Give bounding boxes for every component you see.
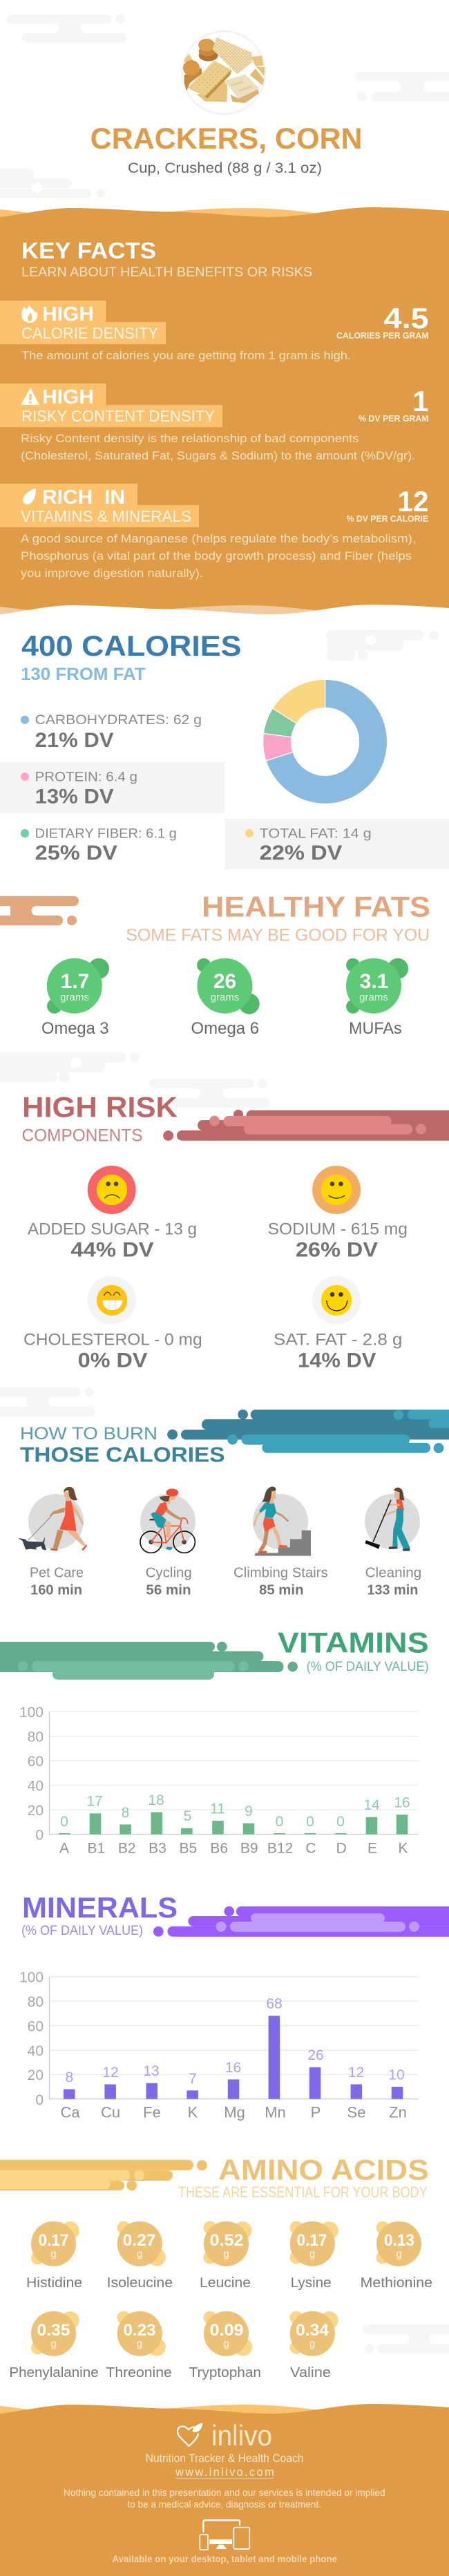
bar chart: vitamins: C (305, 1840, 316, 1856)
disclaimer: to be a medical advice, diagnosis or treatment. (127, 2499, 321, 2510)
activity: pet care: 160 min (30, 1582, 82, 1598)
activity: cleaning: Cleaning (365, 1566, 421, 1581)
stat: omega 3 (41, 958, 109, 1038)
panel: healthy fats (0, 891, 430, 1038)
bar chart: minerals: Mn (265, 2103, 286, 2121)
activity: pet care: Pet Care (30, 1566, 84, 1581)
bar chart: vitamins: B5 (180, 1840, 197, 1856)
stat: phenylalanine: Phenylalanine (9, 2365, 99, 2380)
label: risky content density: RISKY CONTENT DENSITY (21, 407, 215, 425)
bar chart: vitamins: 60 (28, 1754, 44, 1770)
panel: amino acids (0, 2153, 432, 2380)
icon: sad face (97, 1175, 127, 1205)
bar chart: vitamins: 0 (336, 1814, 345, 1830)
bar chart: vitamins: 16 (394, 1795, 410, 1810)
high risk subheading: COMPONENTS (22, 1126, 142, 1146)
stat: threonine: Threonine (106, 2365, 172, 2380)
risk: saturated fat (274, 1276, 402, 1372)
bar chart: minerals: 12 (348, 2065, 364, 2081)
stat: leucine: Leucine (200, 2275, 251, 2291)
calories from fat: 130 FROM FAT (21, 665, 146, 684)
stat: tryptophan (189, 2311, 261, 2380)
panel: vitamins (0, 1626, 429, 1856)
bar chart: vitamins: B6 (210, 1840, 228, 1856)
bar chart: vitamins: 40 (28, 1779, 44, 1794)
label: high: HIGH (42, 386, 94, 408)
burn heading line 1: HOW TO BURN (20, 1424, 157, 1443)
stat: leucine: g (223, 2248, 229, 2260)
stat: lysine: g (309, 2248, 315, 2260)
stat: omega 6 (191, 958, 260, 1038)
risk: sodium: SODIUM - 615 mg (268, 1220, 408, 1239)
stat: omega 6: grams (211, 992, 239, 1003)
stat: methionine: Methionine (361, 2275, 432, 2291)
stat: mufas (346, 958, 408, 1038)
icon: neutral smile face (321, 1175, 352, 1205)
stat: mufas: MUFAs (349, 1019, 402, 1038)
unit: dv per gram: % DV PER GRAM (359, 413, 429, 424)
logo: inlivo: inlivo (211, 2419, 272, 2452)
stat: mufas: grams (359, 992, 388, 1003)
bar chart: minerals: Ca (60, 2103, 80, 2121)
bar chart: vitamins: K (398, 1840, 408, 1856)
stat: methionine: 0.13 (384, 2231, 414, 2250)
bar chart: minerals: 13 (143, 2063, 160, 2079)
legend: dietary fiber: DIETARY FIBER: 6.1 g (35, 827, 177, 842)
legend: protein (0, 762, 225, 813)
bar chart: minerals: 20 (28, 2067, 44, 2083)
website link: www.inlivo.com (175, 2466, 274, 2479)
risk: sodium (268, 1166, 408, 1261)
bar chart: minerals: 100 (19, 1969, 44, 1986)
stat: tryptophan: g (223, 2338, 229, 2349)
bar chart: vitamins: 0 (35, 1827, 44, 1844)
panel: high risk components (22, 1091, 449, 1372)
disclaimer (64, 2487, 385, 2510)
stat: threonine: g (137, 2338, 142, 2349)
risk: saturated fat: SAT. FAT - 2.8 g (274, 1331, 402, 1349)
bar chart: vitamins: 8 (122, 1805, 129, 1821)
tagline: Nutrition Tracker & Health Coach (146, 2452, 304, 2465)
stat: isoleucine: 0.27 (123, 2231, 156, 2250)
vitamins subheading: (% OF DAILY VALUE) (307, 1659, 429, 1674)
legend: carbohydrates (21, 713, 202, 752)
unit: dv per calorie: % DV PER CALORIE (347, 513, 428, 524)
legend: total fat: 22% DV (260, 842, 342, 864)
bar chart: vitamins: B12 (267, 1840, 293, 1856)
bar chart: vitamins: 17 (86, 1794, 103, 1810)
bar chart: vitamins: 18 (148, 1792, 164, 1808)
bar chart: minerals: 68 (266, 1996, 283, 2012)
bar chart: minerals: Zn (389, 2103, 407, 2121)
icon: leaf (23, 489, 36, 504)
minerals heading: MINERALS (22, 1891, 178, 1924)
stat: methionine: g (396, 2248, 402, 2260)
illustration: woman walking dog (18, 1487, 87, 1551)
panel: minerals (19, 1891, 449, 2121)
value: 12: 12 (398, 485, 428, 518)
bar chart: minerals (19, 1969, 418, 2121)
bar chart: minerals: 26 (307, 2047, 324, 2063)
activity: cycling: 56 min (146, 1582, 191, 1598)
stat: valine (290, 2311, 338, 2380)
stat: histidine: 0.17 (39, 2231, 69, 2250)
stat: isoleucine: g (137, 2248, 142, 2260)
risk: cholesterol (23, 1276, 202, 1372)
activity: cycling: Cycling (146, 1566, 192, 1581)
stat: histidine: Histidine (26, 2275, 82, 2291)
risk: added sugar (28, 1166, 197, 1261)
calories heading: 400 CALORIES (21, 629, 242, 662)
bar chart: minerals: 16 (225, 2060, 241, 2076)
bar chart: vitamins: 80 (28, 1730, 44, 1745)
stat: omega 6: Omega 6 (191, 1019, 259, 1038)
description (21, 432, 415, 462)
stat: histidine: g (50, 2248, 57, 2260)
stat: valine: g (309, 2338, 315, 2349)
macronutrient donut chart (263, 679, 388, 804)
minerals subheading: (% OF DAILY VALUE) (21, 1923, 143, 1938)
legend: total fat (225, 819, 449, 869)
stat: mufas: 3.1 (360, 970, 388, 993)
healthy fats subheading: SOME FATS MAY BE GOOD FOR YOU (126, 926, 430, 945)
description: (Cholesterol, Saturated Fat, Sugars & Sodium) to the amount (%DV/gr). (21, 449, 415, 462)
title: CRACKERS, CORN (90, 122, 363, 155)
bar chart: minerals: 8 (65, 2070, 73, 2085)
bar chart: minerals: 12 (102, 2065, 119, 2081)
bar chart: minerals: 80 (28, 1994, 44, 2010)
bar chart: minerals: Fe (143, 2103, 161, 2121)
unit: calories per gram: CALORIES PER GRAM (336, 330, 429, 341)
bar chart: vitamins: B2 (118, 1840, 136, 1856)
stat: methionine (361, 2221, 432, 2291)
panel: footer (0, 2404, 449, 2576)
stat: threonine: 0.23 (123, 2321, 156, 2340)
risk: added sugar: 44% DV (70, 1238, 154, 1261)
serving size subtitle: Cup, Crushed (88 g / 3.1 oz) (128, 160, 322, 176)
legend: carbohydrates: CARBOHYDRATES: 62 g (35, 713, 202, 728)
activity: climbing stairs (233, 1486, 328, 1598)
panel: key facts (0, 207, 449, 632)
bar chart: minerals: 60 (28, 2019, 44, 2034)
bar chart: minerals: Se (347, 2103, 365, 2121)
bar chart: vitamins: 20 (28, 1803, 44, 1819)
illustration: woman climbing stairs (253, 1486, 311, 1556)
illustration: woman sweeping (365, 1488, 420, 1551)
activity: pet care (18, 1487, 87, 1598)
legend: dietary fiber: 25% DV (35, 842, 117, 864)
stat: histidine (26, 2222, 82, 2291)
bar chart: minerals: 10 (388, 2067, 405, 2083)
stat: leucine (200, 2221, 251, 2291)
stat: phenylalanine: g (50, 2338, 57, 2349)
food image: crackers (182, 31, 265, 114)
activity: climbing stairs: 85 min (259, 1582, 304, 1598)
stat: omega 6: 26 (213, 970, 236, 993)
icon: devices (200, 2520, 249, 2550)
icon: happy face (321, 1285, 352, 1316)
key facts subheading: LEARN ABOUT HEALTH BENEFITS OR RISKS (21, 265, 312, 280)
stat: lysine (290, 2221, 338, 2291)
bar chart: vitamins: 11 (210, 1801, 225, 1817)
label: rich in: RICH IN (42, 486, 125, 509)
legend: protein: 13% DV (35, 786, 114, 808)
bar chart: minerals: 0 (35, 2092, 44, 2108)
icon: flame (21, 304, 37, 323)
bar chart: vitamins: 9 (245, 1803, 253, 1819)
vitamins heading: VITAMINS (278, 1626, 429, 1658)
risk: cholesterol: CHOLESTEROL - 0 mg (23, 1331, 202, 1349)
panel: calories (0, 629, 449, 869)
icon: grinning face (97, 1285, 127, 1316)
stat: isoleucine (107, 2221, 173, 2291)
stat: isoleucine: Isoleucine (107, 2275, 173, 2291)
bar chart: vitamins: B1 (87, 1840, 105, 1856)
key facts heading: KEY FACTS (21, 238, 156, 263)
activity: climbing stairs: Climbing Stairs (233, 1566, 328, 1581)
fact: calorie density (0, 301, 429, 362)
risk: sodium: 26% DV (296, 1238, 378, 1261)
description: Risky Content density is the relationship of bad components (21, 432, 359, 445)
legend: protein: PROTEIN: 6.4 g (35, 770, 137, 785)
risk: added sugar: ADDED SUGAR - 13 g (28, 1220, 197, 1239)
bar chart: minerals: Cu (101, 2103, 120, 2121)
bar chart: vitamins: 0 (306, 1814, 314, 1830)
bar chart: vitamins: B3 (149, 1840, 166, 1856)
bar chart: vitamins: 100 (19, 1705, 44, 1721)
burn heading line 2: THOSE CALORIES (20, 1443, 225, 1467)
description: The amount of calories you are getting from 1 gram is high. (21, 349, 351, 362)
bar chart: minerals: K (188, 2103, 198, 2121)
bar chart: minerals: 40 (28, 2043, 44, 2059)
risk: saturated fat: 14% DV (298, 1349, 376, 1372)
value: 1: 1 (412, 385, 429, 417)
description (21, 532, 416, 580)
amino acids heading: AMINO ACIDS (218, 2153, 429, 2186)
logo: inlivo (178, 2419, 272, 2452)
bar chart: vitamins: A (59, 1840, 69, 1856)
bar chart: vitamins: 0 (276, 1814, 283, 1830)
value: 4.5: 4.5 (384, 302, 429, 334)
stat: leucine: 0.52 (210, 2231, 243, 2250)
bar chart: vitamins: B9 (240, 1840, 258, 1856)
stat: omega 3: Omega 3 (41, 1019, 109, 1038)
stat: phenylalanine: 0.35 (37, 2321, 70, 2340)
stat: lysine: Lysine (291, 2275, 332, 2291)
stat: valine: Valine (290, 2365, 331, 2380)
stat: valine: 0.34 (296, 2321, 329, 2340)
activity: cleaning (365, 1488, 421, 1598)
disclaimer: Nothing contained in this presentation and our services is intended or implied (64, 2487, 385, 2498)
fact: risky content density (0, 383, 429, 462)
stat: tryptophan: 0.09 (210, 2321, 243, 2340)
legend: total fat: TOTAL FAT: 14 g (260, 827, 372, 842)
stat: lysine: 0.17 (297, 2231, 327, 2250)
legend: dietary fiber (21, 827, 177, 864)
bar chart: vitamins (19, 1705, 418, 1856)
legend: carbohydrates: 21% DV (35, 729, 114, 752)
description: A good source of Manganese (helps regulate the body’s metabolism), (21, 532, 416, 545)
activity: cycling (140, 1488, 195, 1598)
bar chart: minerals: 7 (189, 2071, 197, 2087)
icon: warning (21, 388, 39, 405)
description: Phosphorus (a vital part of the body growth process) and Fiber (helps (21, 549, 412, 562)
label: high: HIGH (42, 303, 94, 325)
fact: rich in vitamins and minerals (0, 484, 428, 580)
label: vitamins and minerals: VITAMINS & MINERALS (21, 507, 191, 525)
risk: cholesterol: 0% DV (78, 1349, 148, 1372)
bar chart: vitamins: E (367, 1840, 377, 1856)
activity: cleaning: 133 min (367, 1582, 418, 1598)
illustration: cyclist (140, 1488, 195, 1553)
healthy fats heading: HEALTHY FATS (202, 891, 430, 923)
panel: how to burn those calories (18, 1410, 449, 1598)
bar chart: minerals: Mg (224, 2103, 245, 2121)
stat: threonine (106, 2311, 172, 2380)
stat: phenylalanine (9, 2311, 99, 2380)
label: calorie density: CALORIE DENSITY (21, 324, 158, 342)
stat: omega 3: grams (60, 992, 89, 1003)
bar chart: minerals: P (311, 2103, 321, 2121)
description: you improve digestion naturally). (21, 567, 203, 580)
bar chart: vitamins: 0 (60, 1814, 68, 1830)
high risk heading: HIGH RISK (22, 1091, 178, 1124)
bar chart: vitamins: 5 (184, 1808, 191, 1824)
stat: tryptophan: Tryptophan (189, 2365, 261, 2380)
bar chart: vitamins: 14 (363, 1797, 380, 1813)
stat: omega 3: 1.7 (61, 970, 89, 993)
bar chart: vitamins: D (336, 1840, 347, 1856)
availability note: Available on your desktop, tablet and mobile phone (112, 2554, 337, 2564)
